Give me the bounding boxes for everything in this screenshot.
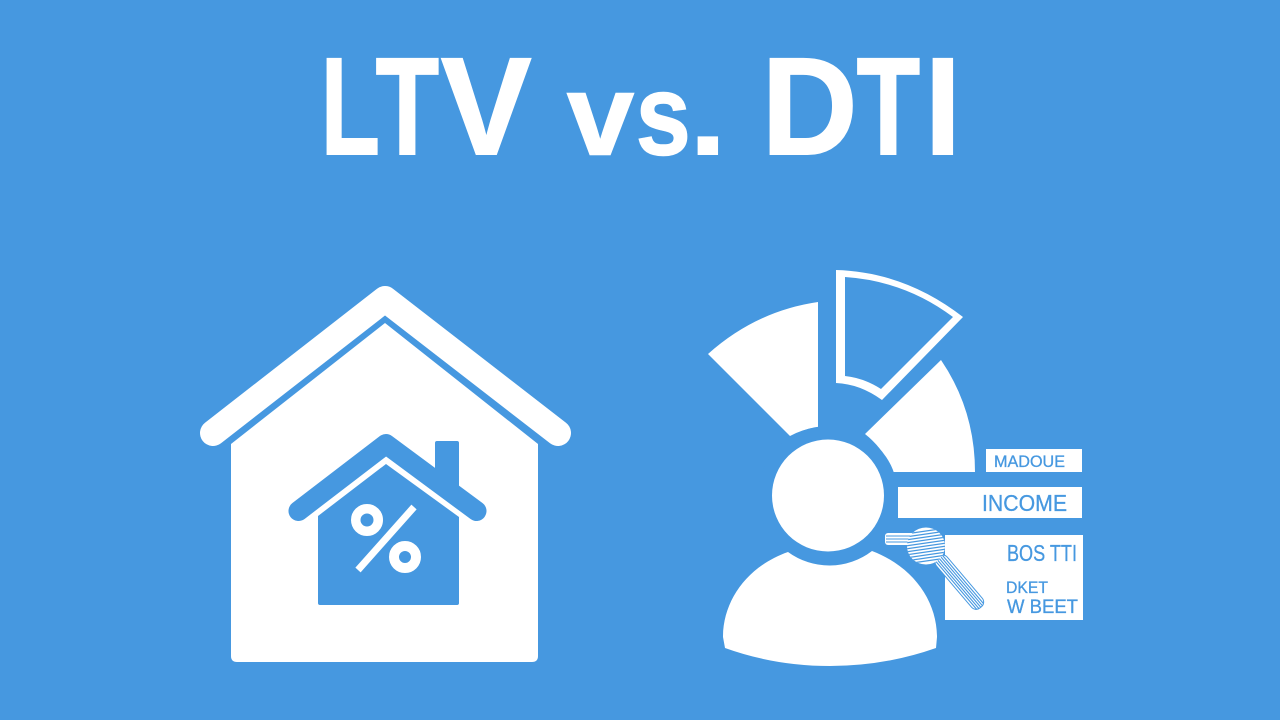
title: L: [321, 29, 380, 184]
icon: house with percent: [213, 299, 558, 662]
title: D: [761, 29, 858, 184]
key head: [907, 528, 945, 564]
person head: [758, 426, 898, 566]
percent sign: [356, 507, 416, 570]
title: T: [376, 29, 439, 184]
label box: document: BOS TTI: [1007, 540, 1077, 566]
person body: [723, 551, 937, 666]
label box: income: [898, 487, 1082, 518]
inner house icon: [298, 441, 476, 605]
icon: person with pie chart and documents: [708, 270, 1083, 666]
title: s: [636, 51, 691, 179]
inner roof: [298, 444, 476, 511]
inner chimney: [435, 441, 459, 491]
house body: [231, 323, 538, 662]
label box: income: INCOME: [982, 490, 1067, 516]
title: I: [924, 29, 961, 184]
key bit: [885, 533, 915, 545]
title: .: [690, 51, 726, 179]
title: T: [856, 29, 920, 184]
label box: madoue: [986, 449, 1082, 472]
title: V: [441, 29, 532, 184]
pie segment outlined: [836, 270, 963, 400]
icon: key: [885, 528, 986, 612]
inner body: [318, 464, 459, 605]
pie segment left: [708, 302, 818, 436]
title: v: [567, 51, 634, 179]
house roof: [213, 299, 558, 433]
label box: madoue: MADOUE: [994, 453, 1065, 471]
label box: document: W BEET: [1007, 597, 1078, 618]
title: [321, 29, 961, 184]
label box: document: [945, 535, 1083, 620]
pie segment right: [865, 360, 975, 472]
key shaft: [933, 552, 986, 612]
label box: document: DKET: [1006, 578, 1048, 597]
